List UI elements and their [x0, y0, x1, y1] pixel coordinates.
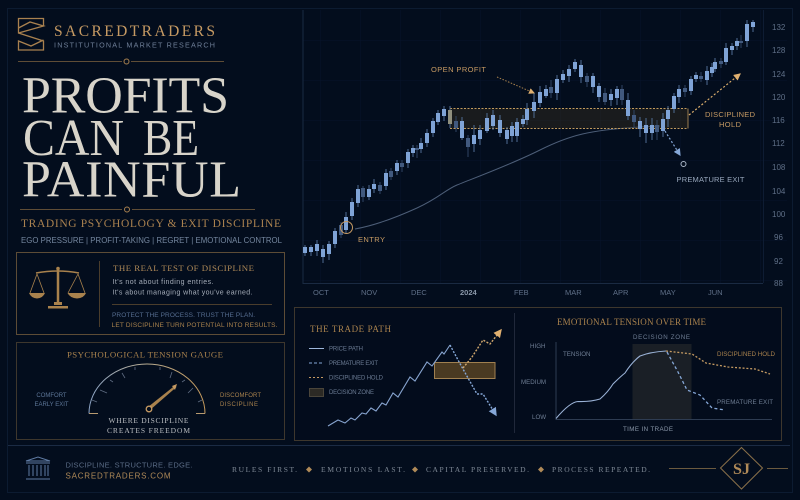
price axis: 128: [772, 46, 786, 55]
title: BE: [143, 110, 199, 167]
time axis: APR: [613, 288, 629, 297]
price axis: 100: [772, 210, 786, 219]
emotional tension chart: TIME IN TRADE: [623, 426, 673, 433]
callout: open profit: OPEN PROFIT: [431, 65, 486, 74]
arrow: disciplined hold: HOLD: [719, 120, 742, 129]
footer monogram: [669, 448, 788, 489]
trade path legend: PREMATURE EXIT: [329, 361, 378, 367]
gauge dial: [89, 364, 205, 414]
price axis: 132: [772, 23, 786, 32]
brand name: SACREDTRADERS: [54, 23, 215, 40]
gauge left label: COMFORT: [36, 393, 67, 399]
panel: psychological tension gauge: DISCIPLINE: [220, 402, 258, 408]
time axis: JUN: [708, 288, 723, 297]
topic list: EGO PRESSURE | PROFIT-TAKING | REGRET | EMOTIONAL CONTROL: [21, 236, 283, 245]
price axis: 116: [772, 116, 785, 125]
emotional tension chart: [521, 334, 776, 433]
icon: institution building: [26, 457, 50, 479]
trade path legend: DISCIPLINED HOLD: [329, 376, 384, 382]
gauge right label: DISCOMFORT: [220, 393, 261, 399]
panel: the real test of discipline: LET DISCIPLINE TURN POTENTIAL INTO RESULTS.: [112, 322, 278, 329]
title: [22, 68, 241, 208]
entry marker: [340, 222, 385, 244]
footer: SACREDTRADERS.COM: [66, 472, 171, 480]
footer brand text: DISCIPLINE. STRUCTURE. EDGE.: [66, 460, 192, 470]
time axis: OCT: [313, 288, 329, 297]
gauge heading: PSYCHOLOGICAL TENSION GAUGE: [67, 350, 223, 360]
emotional tension chart: HIGH: [530, 343, 545, 350]
title: CAN: [23, 110, 124, 167]
panel: psychological tension gauge: EARLY EXIT: [34, 402, 69, 408]
footer rules: PROCESS REPEATED.: [552, 465, 650, 474]
entry label: ENTRY: [358, 235, 385, 244]
footer: [8, 446, 790, 489]
time axis: DEC: [411, 288, 427, 297]
arrow: premature exit: [665, 131, 745, 184]
emotional tension chart: PREMATURE EXIT: [717, 399, 773, 406]
candlesticks: [305, 20, 753, 263]
footer monogram: SJ: [733, 461, 750, 478]
panel: psychological tension gauge: CREATES FREEDOM: [107, 426, 190, 435]
footer rules: EMOTIONS LAST.: [321, 465, 405, 474]
time axis: MAR: [565, 288, 582, 297]
price axis: 108: [772, 163, 786, 172]
arrow: premature exit: PREMATURE EXIT: [676, 175, 745, 184]
time axis: MAY: [660, 288, 676, 297]
trade path legend: DECISION ZONE: [329, 390, 374, 396]
footer rules: RULES FIRST.: [232, 465, 297, 474]
emotional tension chart: MEDIUM: [521, 379, 546, 386]
bright candle wicks: [305, 20, 753, 263]
trade path chart: [328, 330, 501, 426]
gauge needle: [146, 384, 177, 412]
time axis: 2024: [460, 288, 478, 297]
panel: the real test of discipline: [16, 252, 284, 334]
panel: psychological tension gauge: [16, 342, 284, 440]
callout: open profit: [431, 65, 534, 93]
trade path heading: THE TRADE PATH: [310, 324, 392, 334]
panel: the real test of discipline: It's about managing what you've earned.: [112, 290, 253, 296]
icon: sacredtraders logo: [18, 18, 44, 50]
price axis: 92: [774, 257, 783, 266]
price axis: 120: [772, 93, 786, 102]
bright candle bodies: [305, 22, 753, 257]
discipline statement: PROTECT THE PROCESS. TRUST THE PLAN.: [112, 312, 255, 319]
panel: trade path and emotional tension: [294, 308, 782, 440]
price axis: 124: [772, 70, 786, 79]
footer rules: CAPITAL PRESERVED.: [426, 465, 529, 474]
arrow: disciplined hold: [689, 74, 756, 129]
gauge caption: WHERE DISCIPLINE: [108, 416, 189, 425]
time axis: FEB: [514, 288, 529, 297]
emotional tension chart: TENSION: [563, 351, 591, 358]
price axis: 96: [774, 233, 783, 242]
moving average line: [355, 126, 660, 229]
emotional tension chart: DECISION ZONE: [633, 334, 690, 341]
time axis: [313, 288, 723, 297]
emotional tension heading: EMOTIONAL TENSION OVER TIME: [557, 317, 706, 327]
trade path legend: [309, 346, 384, 396]
footer rules: [232, 465, 650, 474]
price axis: [772, 23, 786, 288]
icon: balance scales: [29, 267, 86, 308]
title: PROFITS: [22, 68, 229, 124]
highlighted candle: [448, 110, 452, 124]
trade path legend: PRICE PATH: [329, 346, 363, 352]
body text: It's not about finding entries.: [112, 279, 214, 286]
price axis: 112: [772, 139, 785, 148]
dim candle wicks: [341, 35, 741, 238]
title: PAINFUL: [22, 152, 241, 208]
arrow: disciplined hold: DISCIPLINED: [705, 110, 756, 119]
emotional tension chart: LOW: [532, 414, 546, 421]
panel: candlestick price chart: [303, 10, 787, 297]
emotional tension chart: DISCIPLINED HOLD: [717, 351, 776, 358]
price axis: 104: [772, 187, 786, 196]
decision zone band: [450, 108, 688, 128]
brand tagline: INSTITUTIONAL MARKET RESEARCH: [54, 40, 215, 50]
subtitle: TRADING PSYCHOLOGY & EXIT DISCIPLINE: [21, 218, 281, 230]
time axis: NOV: [361, 288, 377, 297]
panel heading: THE REAL TEST OF DISCIPLINE: [113, 263, 254, 273]
brand header: [18, 18, 215, 50]
price axis: 88: [774, 279, 783, 288]
dim candle bodies: [341, 41, 741, 235]
